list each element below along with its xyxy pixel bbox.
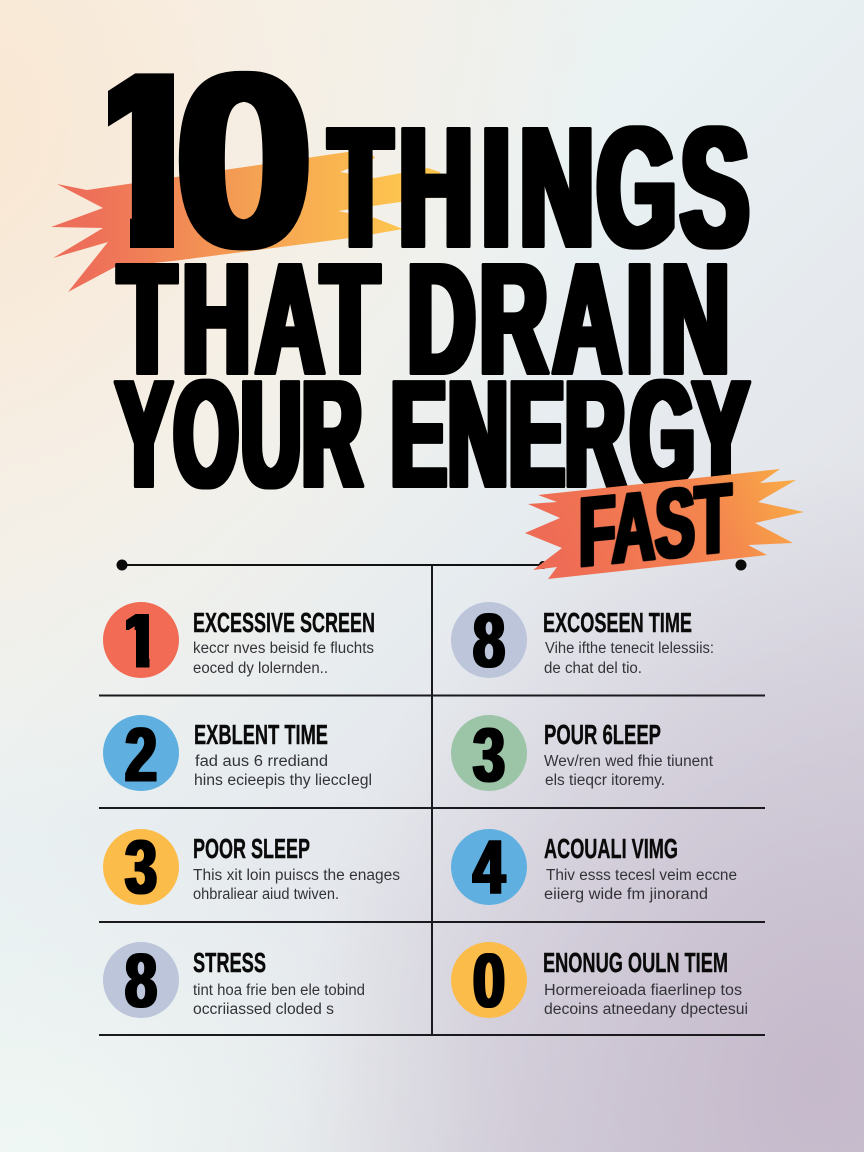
title line: that drain: THAT DRAIN bbox=[118, 232, 729, 407]
description: fad aus 6 rrediand bbox=[195, 753, 328, 770]
number badge 2: 2 bbox=[125, 713, 157, 798]
heading: EXCOSEEN TIME bbox=[543, 607, 692, 638]
heading: EXBLENT TIME bbox=[194, 719, 328, 750]
description: Hormereioada fiaerlinep tos bbox=[544, 982, 742, 999]
item: acouali vimg bbox=[451, 825, 737, 910]
description: Wev/ren wed fhie tiunent bbox=[544, 753, 714, 770]
burst behind the word fast bbox=[525, 469, 804, 579]
number badge 8 bbox=[451, 599, 527, 684]
title bbox=[108, 70, 752, 490]
description: tint hoa frie ben ele tobind bbox=[193, 982, 365, 999]
heading: ACOUALI VIMG bbox=[544, 833, 678, 864]
description: hins ecieepis thy lieccIegl bbox=[194, 772, 372, 789]
heading: STRESS bbox=[193, 947, 266, 978]
item: excessive screen bbox=[103, 602, 374, 678]
heading: ENONUG OULN TIEM bbox=[543, 947, 728, 978]
description: Thiv esss tecesl veim eccne bbox=[546, 867, 737, 884]
number badge 8 bbox=[103, 939, 179, 1024]
title number 1: 1 bbox=[79, 21, 217, 299]
heading: POUR 6LEEP bbox=[544, 719, 661, 750]
item: pour 6leep bbox=[451, 713, 714, 798]
item: enonug ouln tiem bbox=[451, 939, 748, 1024]
number badge 0 bbox=[451, 939, 527, 1024]
number badge 8: 8 bbox=[125, 939, 157, 1024]
description: Vihe ifthe tenecit lelessiis: bbox=[545, 640, 714, 657]
description: occriiassed cloded s bbox=[193, 1001, 334, 1018]
number badge 3 bbox=[103, 825, 179, 910]
heading: POOR SLEEP bbox=[193, 833, 310, 864]
number badge 8: 8 bbox=[473, 599, 505, 684]
dot near fast bbox=[736, 560, 746, 570]
description: ohbraliear aiud twiven. bbox=[193, 886, 339, 903]
item: exblent time bbox=[103, 713, 372, 798]
table grid bbox=[99, 565, 765, 1035]
number badge 3 bbox=[451, 713, 527, 798]
number badge 4: 4 bbox=[473, 825, 505, 910]
description: keccr nves beisid fe fluchts bbox=[193, 640, 374, 657]
burst behind the number 10 bbox=[51, 149, 449, 292]
word fast: FAST bbox=[579, 463, 731, 587]
item: poor sleep bbox=[103, 825, 400, 910]
description: eiierg wide fm jinorand bbox=[544, 886, 708, 903]
number badge 1 bbox=[103, 602, 179, 678]
item: stress bbox=[103, 939, 365, 1024]
description: eoced dy lolernden.. bbox=[193, 660, 328, 677]
title number 0: 0 bbox=[175, 21, 313, 299]
number badge 2 bbox=[103, 713, 179, 798]
heading: EXCESSIVE SCREEN bbox=[193, 607, 375, 638]
number badge 3: 3 bbox=[125, 825, 157, 910]
description: de chat del tio. bbox=[544, 660, 642, 677]
divider: top rule with dots bbox=[116, 560, 547, 570]
number badge 0: 0 bbox=[473, 939, 505, 1024]
number badge 1: 1 bbox=[119, 599, 161, 684]
description: This xit loin puiscs the enages bbox=[193, 867, 400, 884]
title line: your energy: YOUR ENERGY bbox=[116, 350, 749, 518]
number badge 3: 3 bbox=[473, 713, 505, 798]
title line: things: THINGS bbox=[329, 92, 749, 282]
description: decoins atneedany dpectesui bbox=[544, 1001, 748, 1018]
item: excoseen time bbox=[451, 599, 714, 684]
description: els tieqcr itoremy. bbox=[545, 772, 665, 789]
number badge 4 bbox=[451, 825, 527, 910]
